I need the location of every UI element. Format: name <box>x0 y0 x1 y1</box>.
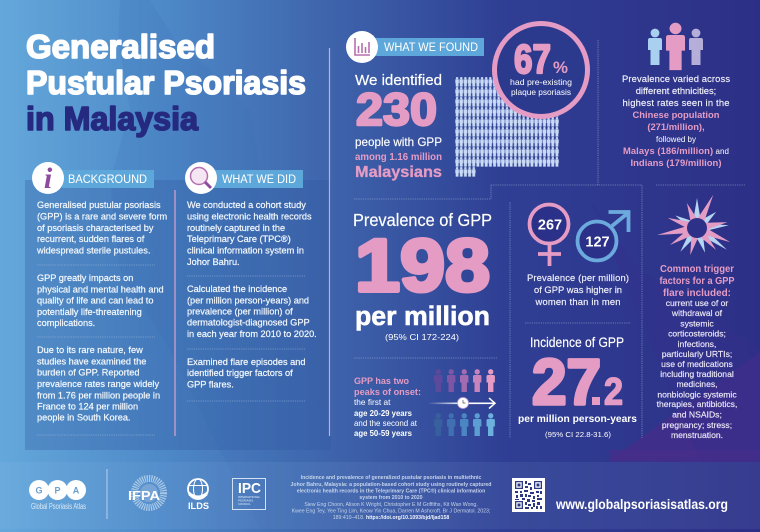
heading: what we found: WHAT WE FOUND <box>384 42 478 54</box>
callout: 67 percent <box>494 24 588 116</box>
text: peaks of onset: the first at <box>354 397 391 407</box>
text: calculation: (per million person-years) and <box>187 296 309 306</box>
text: trigger factors: systemic <box>680 318 714 328</box>
text: trigger factors <box>657 264 737 440</box>
stat: prevalence of GPP: (95% CI 172-224) <box>385 332 459 342</box>
arrow: age timeline <box>428 398 495 408</box>
title: Pustular Psoriasis <box>26 64 306 101</box>
text: trigger factors: pregnancy; stress; <box>662 420 732 430</box>
text: ethnicity prevalence: followed by <box>656 135 696 144</box>
text: definition <box>36 200 168 256</box>
text: rarity: burden of GPP. Reported <box>37 368 140 378</box>
text: definition: Generalised pustular psoriasis <box>37 200 161 210</box>
stat: 230 people: among 1.16 million <box>355 152 442 163</box>
text: definition: of psoriasis characterised by <box>37 223 154 233</box>
logo: IPC <box>232 478 266 510</box>
text: study: Johor Bahru. <box>187 257 240 267</box>
text: peaks of onset: age 20-29 years <box>354 408 412 418</box>
logo: IFPA <box>128 478 164 508</box>
citation: system from 2010 to 2020 <box>359 495 423 501</box>
text: trigger factors: medicines, <box>676 379 718 389</box>
text: trigger factors: current use of or <box>666 298 728 308</box>
text: rarity: studies have examined the <box>37 356 146 366</box>
text: trigger factors: infections, <box>678 339 716 349</box>
logo: Global Psoriasis Atlas: P <box>54 486 61 496</box>
text: study: using electronic health records <box>187 212 312 222</box>
stat: incidence of GPP: Incidence of GPP <box>530 335 624 350</box>
heading: what we found <box>346 31 484 63</box>
panel: what we did <box>185 162 317 401</box>
stat: 230 people: Malaysians <box>355 164 442 181</box>
text: peaks of onset: GPP has two <box>354 376 409 387</box>
text: study <box>187 200 312 267</box>
stat: 230 people: people with GPP <box>355 135 442 149</box>
citation <box>291 475 491 521</box>
text: sex difference: of GPP was higher in <box>534 284 622 295</box>
text: rarity: from 1.76 per million people in <box>37 390 160 400</box>
heading: background <box>32 162 154 195</box>
text: study: We conducted a cohort study <box>187 200 306 210</box>
text: calculation <box>187 284 317 339</box>
text: trigger factors: nonbiologic systemic <box>657 390 737 400</box>
icon: flare burst <box>656 193 732 256</box>
text: calculation: dermatologist-diagnosed GPP <box>187 318 310 328</box>
logo: IFPA: IFPA <box>128 488 161 503</box>
text: ethnicity prevalence: Chinese population <box>632 109 720 120</box>
stat: incidence of GPP: 2 <box>604 372 623 414</box>
text: definition: widespread sterile pustules. <box>36 246 150 256</box>
stat: incidence of GPP: (95% CI 22.8-31.6) <box>545 430 612 439</box>
QR code <box>512 478 545 512</box>
text: peaks of onset: and the second at <box>354 418 418 428</box>
text: trigger factors: use of medications <box>661 359 733 369</box>
stat: prevalence of GPP <box>353 210 492 342</box>
text: trigger factors: factors for a GPP <box>660 276 735 287</box>
text: impact: potentially life-threatening <box>37 307 142 317</box>
text: rarity: Due to its rare nature, few <box>37 345 143 355</box>
logo: IPC: IPC <box>238 480 261 497</box>
text: calculation: prevalence (per million) of <box>187 306 293 316</box>
stat: incidence of GPP <box>518 335 637 439</box>
heading: what we did <box>185 162 303 194</box>
citation: electronic health records in the Teleprimary Care (TPC®) clinical information <box>297 488 485 494</box>
text: impact <box>37 273 164 328</box>
logo: IPC: COUNCIL <box>238 502 251 506</box>
text: ethnicity prevalence: Malays (186/million) and <box>623 145 729 156</box>
text: peaks of onset: age 50-59 years <box>354 428 412 438</box>
text: flares: Examined flare episodes and <box>187 357 306 367</box>
icon: female symbol 267: 267 <box>538 218 562 234</box>
stat: incidence of GPP: 27 <box>532 346 601 418</box>
icon: male symbol 127: 127 <box>585 234 610 250</box>
heading: what we did: WHAT WE DID <box>222 174 296 186</box>
text: trigger factors: and NSAIDs; <box>672 410 722 420</box>
text: trigger factors: therapies, antibiotics, <box>657 399 737 409</box>
title: in Malaysia <box>26 100 199 137</box>
callout: 67 percent: plaque psoriasis <box>511 88 571 97</box>
text: ethnicity prevalence: different ethnicities; <box>636 85 716 96</box>
logo: ILDS: ILDS <box>188 501 209 512</box>
text: sex difference <box>527 272 629 307</box>
citation: 189:410–418. https://doi.org/10.1093/bjd/ljad158 <box>333 515 449 521</box>
stat: 230 people: 230 <box>356 84 437 135</box>
stat: 230 people <box>355 73 442 181</box>
text: definition: recurrent, sudden flares of <box>37 234 145 244</box>
text: impact: complications. <box>37 318 95 328</box>
pictogram: age peaks <box>428 369 495 436</box>
text: rarity <box>37 345 160 422</box>
heading: background: i <box>44 162 53 195</box>
title: Generalised <box>26 28 215 65</box>
text: trigger factors: flare included: <box>663 288 731 299</box>
text: ethnicity prevalence: (271/million), <box>647 121 705 132</box>
citation: Kwee Eng Tey, Yee Ting Lim, Keow Yin Chua, Darren M Ashcroft. Br J Dermatol. 2023; <box>292 508 490 514</box>
logo: IPC: INTERNATIONAL <box>238 495 261 499</box>
logo: Global Psoriasis Atlas: G <box>35 486 43 496</box>
text: sex difference: Prevalence (per million) <box>527 272 629 283</box>
text: peaks of onset: peaks of onset: <box>354 387 421 398</box>
callout: 67 percent: % <box>553 58 568 77</box>
panel: background <box>32 162 168 435</box>
logo: Global Psoriasis Atlas: Global Psoriasis Atlas <box>31 502 86 511</box>
stat: 230 people: We identified <box>355 73 442 89</box>
logo: Global Psoriasis Atlas <box>29 480 86 511</box>
text: study: Teleprimary Care (TPC®) <box>187 234 291 244</box>
text: calculation: Calculated the incidence <box>187 284 287 294</box>
text: impact: physical and mental health and <box>37 284 164 294</box>
text: flares <box>187 357 306 390</box>
text: peaks of onset <box>354 376 421 438</box>
stat: incidence of GPP: per million person-years <box>518 413 637 425</box>
text: trigger factors: corticosteroids; <box>668 328 726 338</box>
title <box>26 28 306 137</box>
text: ethnicity prevalence <box>622 73 730 168</box>
logo: ILDS <box>188 479 209 512</box>
icon: male symbol 127 <box>578 212 628 260</box>
stat: prevalence of GPP: Prevalence of GPP <box>353 210 492 230</box>
stat: prevalence of GPP: per million <box>355 301 490 331</box>
text: impact: quality of life and can lead to <box>37 296 153 306</box>
text: trigger factors: menstruation. <box>671 430 723 440</box>
icon: three people <box>648 23 703 70</box>
heading: background: BACKGROUND <box>68 174 147 186</box>
text: rarity: France to 124 per million <box>37 402 138 412</box>
text: study: routinely captured in the <box>187 223 285 233</box>
text: calculation: in each year from 2010 to 2020. <box>187 329 317 339</box>
text: ethnicity prevalence: highest rates seen in the <box>622 97 730 108</box>
text: ethnicity prevalence: Prevalence varied across <box>622 73 730 84</box>
citation: Incidence and prevalence of generalized pustular psoriasis in multiethnic <box>301 475 481 481</box>
callout: 67 percent: had pre-existing <box>510 78 572 87</box>
text: flares: identified trigger factors of <box>187 368 293 378</box>
stat: prevalence of GPP: 198 <box>355 224 490 307</box>
citation: Siew Eng Choon, Alison K Wright, Christopher E M Griffiths, Kit Wan Wong, <box>304 502 478 508</box>
text: impact: GPP greatly impacts on <box>37 273 133 283</box>
text: study: clinical information system in <box>187 246 304 256</box>
text: rarity: people in South Korea. <box>37 412 130 422</box>
citation: Johor Bahru, Malaysia: a population-based cohort study using routinely captured <box>291 482 491 488</box>
text: flares: GPP flares. <box>187 380 234 390</box>
callout: 67 percent: 67 <box>514 36 551 82</box>
text: trigger factors: withdrawal of <box>671 308 723 318</box>
pictogram: 230 people <box>455 77 559 177</box>
text: ethnicity prevalence: Indians (179/million) <box>630 157 722 168</box>
text: trigger factors: particularly URTIs; <box>662 349 732 359</box>
logo: IPC: PSORIASIS <box>238 498 253 502</box>
text: rarity: prevalence rates range widely <box>37 379 159 389</box>
text: definition: (GPP) is a rare and severe form <box>37 212 168 222</box>
icon: female symbol 267 <box>530 204 568 266</box>
logo: Global Psoriasis Atlas: A <box>73 486 80 496</box>
text: trigger factors: Common trigger <box>660 264 734 275</box>
text: trigger factors: including traditional <box>660 369 734 379</box>
text: sex difference: women than in men <box>534 296 620 307</box>
website URL: www.globalpsoriasisatlas.org <box>555 497 728 512</box>
